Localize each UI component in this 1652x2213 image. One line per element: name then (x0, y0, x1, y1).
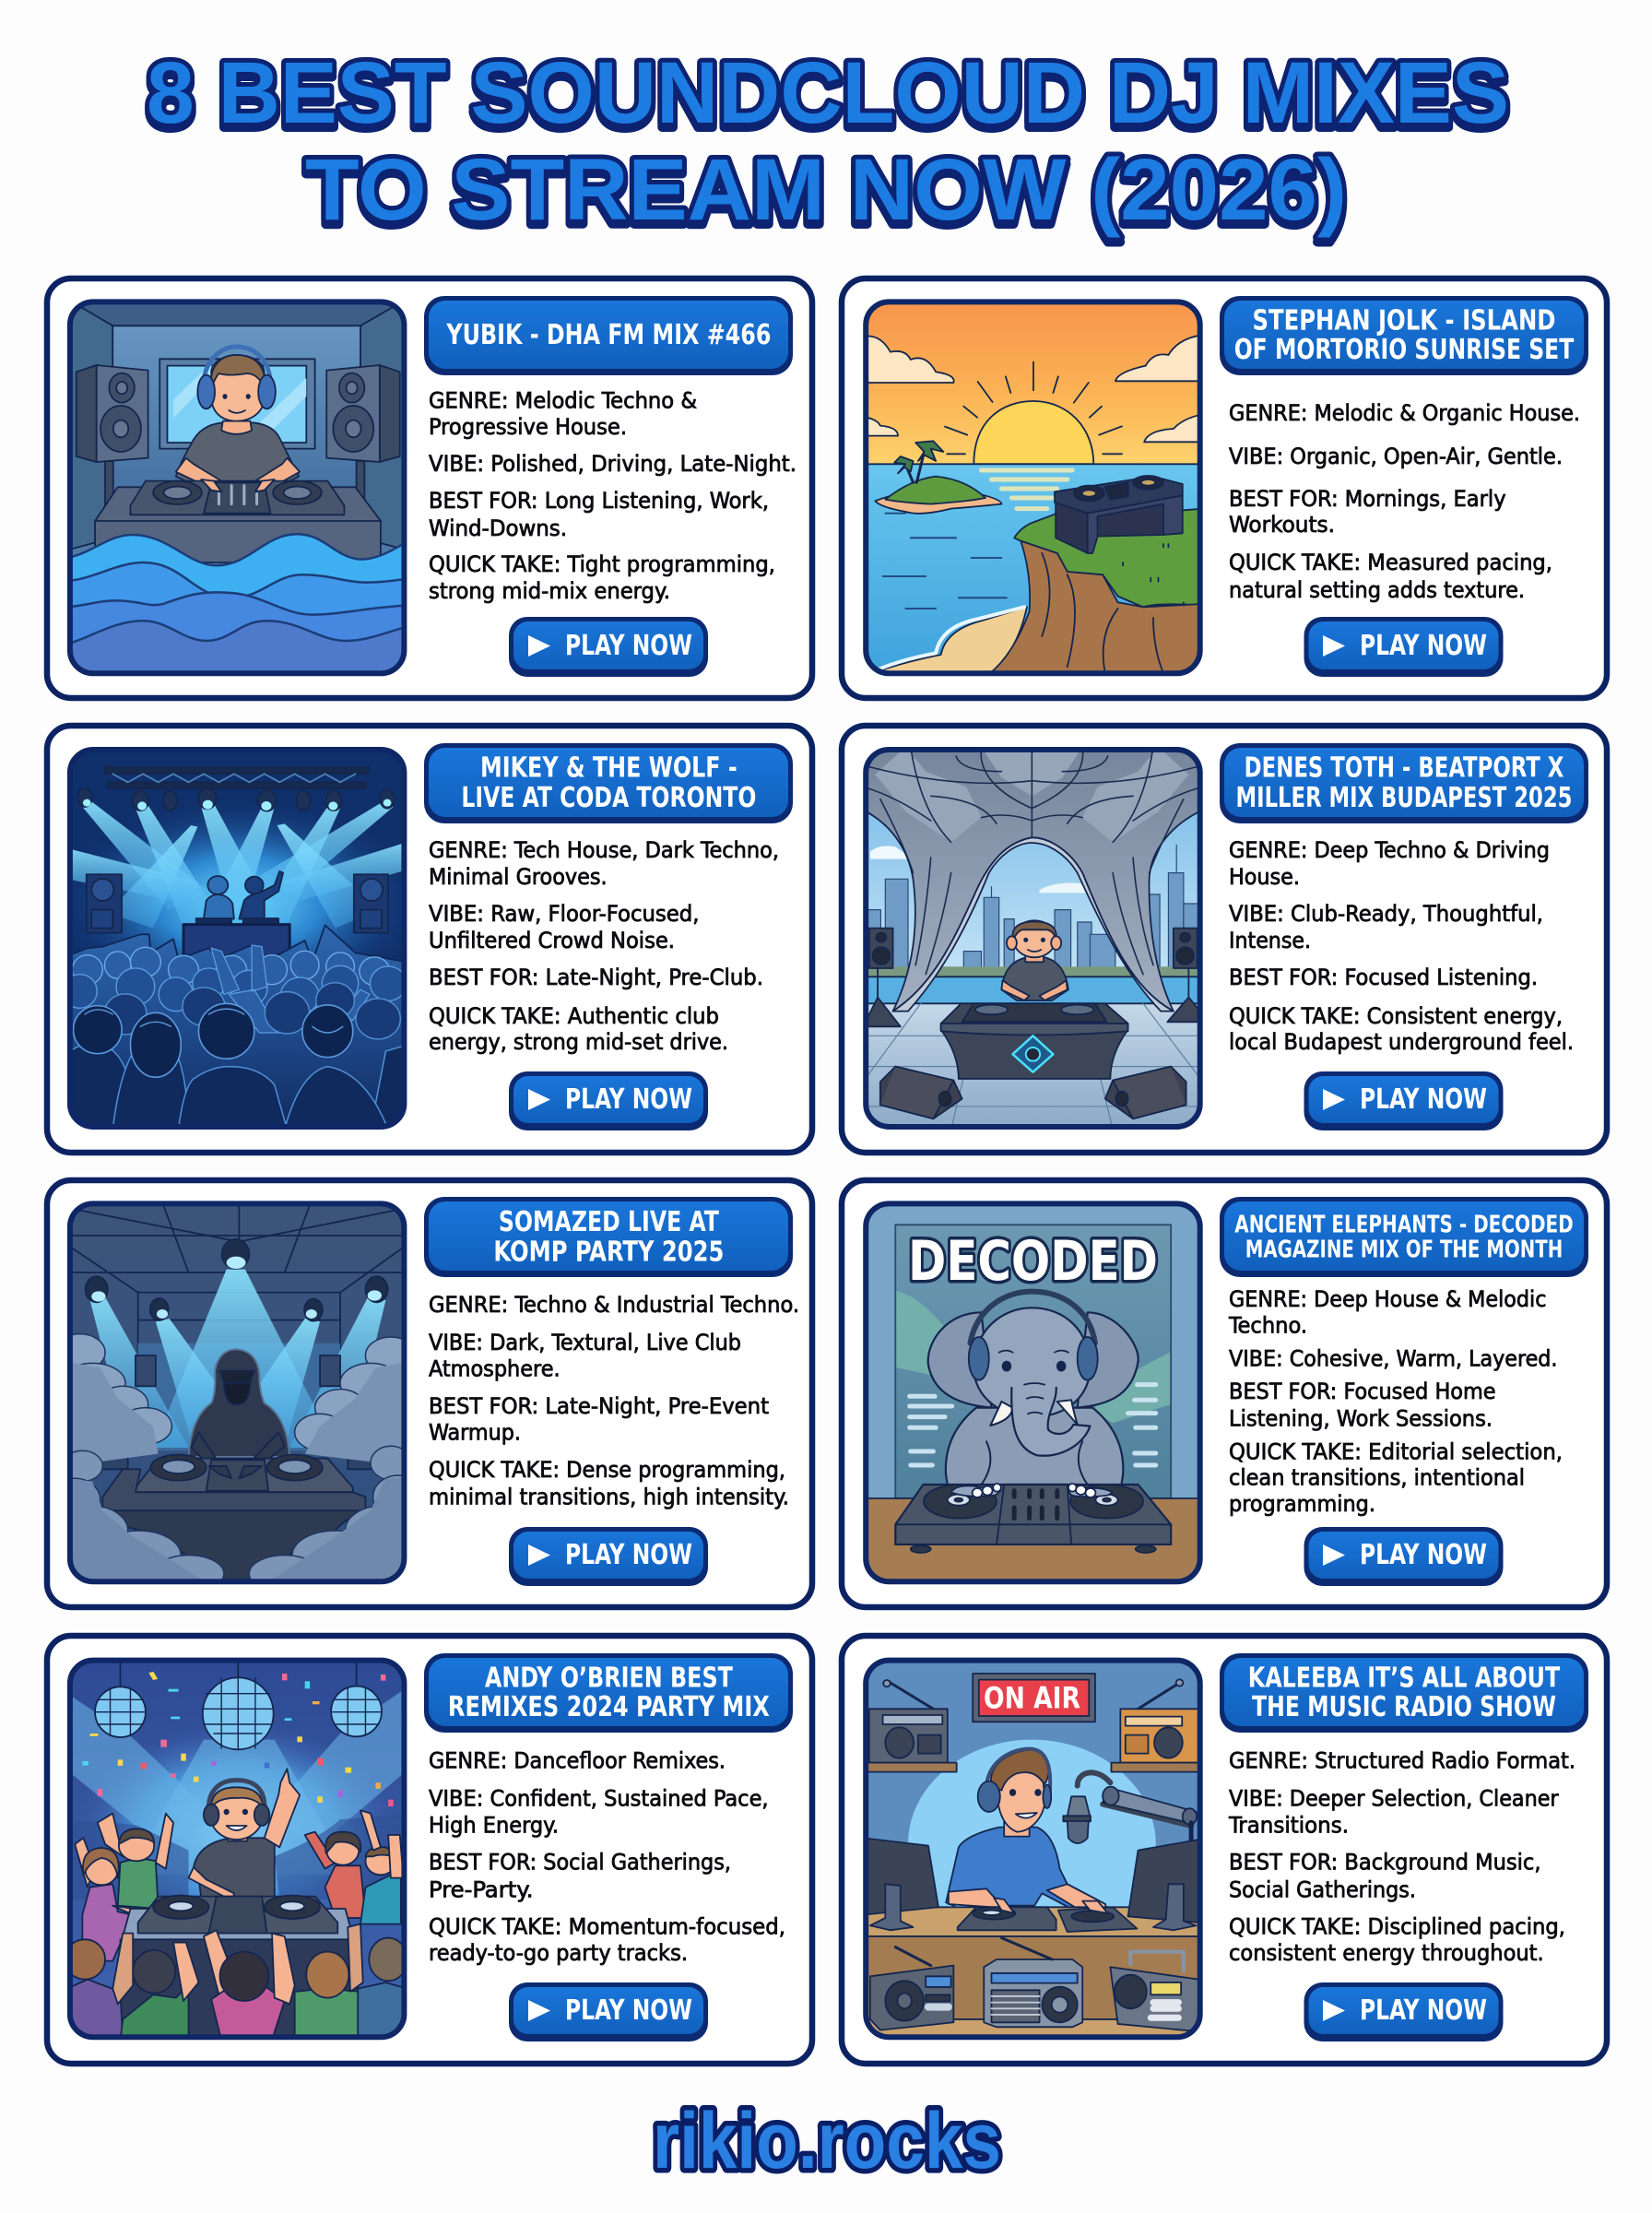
vibe (1228, 1784, 1560, 1838)
play button (1304, 617, 1503, 677)
genre: GENRE: Structured Radio Format. (1229, 1746, 1575, 1773)
panel: Stephan Jolk (842, 278, 1607, 698)
best for: Wind-Downs. (429, 515, 567, 541)
genre (429, 387, 697, 440)
footer brand: rikio.rocks (653, 2097, 1001, 2185)
genre: Minimal Grooves. (429, 863, 608, 890)
illustration: hooded DJ with smoke and spotlights (66, 1201, 407, 1584)
genre (1228, 1285, 1547, 1339)
vibe: VIBE: Raw, Floor-Focused, (429, 900, 699, 927)
quick take: QUICK TAKE: Editorial selection, (1229, 1438, 1563, 1464)
best for: Pre-Party. (429, 1876, 533, 1902)
title pill: KALEEBA IT’S ALL ABOUT (1248, 1662, 1560, 1694)
quick take: local Budapest underground feel. (1229, 1028, 1574, 1055)
play button (1304, 1071, 1503, 1130)
play button: PLAY NOW (1360, 1994, 1487, 2027)
title pill: ANCIENT ELEPHANTS - DECODED (1234, 1212, 1574, 1239)
best for: BEST FOR: Focused Home (1229, 1378, 1496, 1404)
quick take: energy, strong mid-set drive. (429, 1028, 728, 1055)
best for: Warmup. (429, 1419, 521, 1446)
vibe (429, 1784, 769, 1838)
best for (429, 487, 769, 541)
title pill: THE MUSIC RADIO SHOW (1252, 1691, 1556, 1723)
title pill (1220, 743, 1588, 823)
best for: BEST FOR: Long Listening, Work, (429, 487, 769, 514)
play button (509, 1071, 708, 1130)
quick take: QUICK TAKE: Tight programming, (429, 550, 775, 577)
title pill: MILLER MIX BUDAPEST 2025 (1235, 782, 1573, 814)
panel: Denes Toth (842, 726, 1607, 1153)
title pill: OF MORTORIO SUNRISE SET (1234, 334, 1575, 366)
best for: BEST FOR: Background Music, (1229, 1849, 1541, 1876)
quick take (429, 1456, 789, 1510)
title pill: LIVE AT CODA TORONTO (461, 782, 756, 814)
vibe: VIBE: Polished, Driving, Late-Night. (429, 450, 796, 477)
genre: GENRE: Tech House, Dark Techno, (429, 836, 779, 863)
genre: GENRE: Melodic & Organic House. (1229, 399, 1580, 426)
genre (1229, 836, 1550, 890)
play button: PLAY NOW (1360, 1539, 1487, 1571)
quick take (1229, 1912, 1565, 1966)
quick take: minimal transitions, high intensity. (429, 1484, 789, 1510)
title pill (424, 296, 793, 375)
genre: GENRE: Deep Techno & Driving (1229, 836, 1550, 863)
quick take: QUICK TAKE: Momentum-focused, (429, 1912, 785, 1939)
play button: PLAY NOW (565, 1994, 692, 2027)
vibe: Unfiltered Crowd Noise. (429, 927, 675, 953)
quick take (429, 1002, 728, 1055)
play button (509, 1982, 708, 2041)
vibe: VIBE: Dark, Textural, Live Club (429, 1329, 741, 1355)
quick take (429, 1912, 785, 1966)
vibe: High Energy. (429, 1811, 559, 1838)
title pill: KOMP PARTY 2025 (493, 1236, 724, 1268)
illustration: party DJ with disco balls and crowd (65, 1658, 407, 2041)
best for: Listening, Work Sessions. (1229, 1405, 1493, 1432)
quick take (1229, 1002, 1574, 1055)
quick take: QUICK TAKE: Authentic club (429, 1002, 719, 1029)
panel: Mikey and the Wolf (47, 726, 812, 1153)
quick take: programming. (1229, 1490, 1375, 1517)
quick take: ready-to-go party tracks. (429, 1939, 688, 1966)
play button (1304, 1527, 1503, 1586)
quick take: QUICK TAKE: Dense programming, (429, 1456, 785, 1483)
vibe: VIBE: Organic, Open-Air, Gentle. (1229, 443, 1563, 469)
title pill (424, 743, 793, 823)
best for (429, 1392, 769, 1446)
vibe: Atmosphere. (429, 1355, 560, 1382)
quick take (429, 550, 775, 604)
title pill: SOMAZED LIVE AT (499, 1206, 719, 1238)
best for: BEST FOR: Late-Night, Pre-Event (429, 1392, 769, 1419)
title pill: REMIXES 2024 PARTY MIX (448, 1691, 770, 1723)
genre (429, 836, 779, 890)
genre: Techno. (1228, 1312, 1307, 1339)
play button: PLAY NOW (565, 1083, 692, 1116)
genre: House. (1229, 863, 1300, 890)
best for: BEST FOR: Focused Listening. (1229, 964, 1538, 990)
title pill: STEPHAN JOLK - ISLAND (1252, 305, 1556, 337)
quick take: QUICK TAKE: Disciplined pacing, (1229, 1912, 1565, 1939)
title pill: YUBIK - DHA FM MIX #466 (446, 319, 771, 351)
genre: GENRE: Melodic Techno & (429, 387, 697, 414)
quick take: natural setting adds texture. (1229, 576, 1525, 603)
quick take (1229, 549, 1552, 603)
vibe (429, 900, 699, 953)
genre: GENRE: Techno & Industrial Techno. (429, 1291, 799, 1318)
illustration: elephant DJ magazine cover (863, 1201, 1203, 1584)
quick take: clean transitions, intentional (1229, 1464, 1525, 1491)
best for (429, 1849, 731, 1902)
panel: Ancient Elephants (842, 1180, 1607, 1607)
best for: Workouts. (1229, 511, 1335, 538)
best for: BEST FOR: Late-Night, Pre-Club. (429, 964, 763, 990)
title (147, 44, 1509, 239)
title pill (1220, 1197, 1588, 1277)
title: TO STREAM NOW (2026) (305, 141, 1347, 239)
quick take: strong mid-mix energy. (429, 577, 670, 604)
panel: Kaleeba (842, 1636, 1607, 2064)
panel: Andy O'Brien (47, 1636, 812, 2064)
play button (1304, 1982, 1503, 2041)
crowd (63, 925, 407, 1130)
quick take: QUICK TAKE: Measured pacing, (1229, 549, 1552, 575)
title pill (1220, 1653, 1588, 1733)
genre: GENRE: Dancefloor Remixes. (429, 1746, 726, 1773)
best for: BEST FOR: Mornings, Early (1229, 485, 1506, 512)
title pill (1220, 296, 1588, 375)
title pill: MIKEY & THE WOLF - (480, 752, 738, 785)
play button: PLAY NOW (1360, 1083, 1487, 1116)
quick take (1229, 1438, 1563, 1517)
vibe: VIBE: Confident, Sustained Pace, (429, 1784, 769, 1811)
vibe (1229, 900, 1543, 953)
illustration: elephant DJ magazine cover: DECODED (908, 1229, 1158, 1294)
vibe: Transitions. (1228, 1811, 1349, 1838)
illustration: sunrise over island cliff (863, 299, 1203, 676)
play button (509, 1527, 708, 1586)
best for: Social Gatherings. (1229, 1876, 1416, 1902)
genre: Progressive House. (429, 413, 627, 440)
title pill: DENES TOTH - BEATPORT X (1245, 752, 1564, 785)
quick take: QUICK TAKE: Consistent energy, (1229, 1002, 1563, 1029)
vibe: VIBE: Cohesive, Warm, Layered. (1229, 1345, 1558, 1372)
vibe: VIBE: Deeper Selection, Cleaner (1229, 1784, 1560, 1811)
vibe: VIBE: Club-Ready, Thoughtful, (1229, 900, 1543, 927)
vibe: Intense. (1229, 927, 1311, 953)
panel: Yubik (47, 278, 812, 698)
title pill: ANDY O’BRIEN BEST (485, 1662, 733, 1694)
play button: PLAY NOW (565, 630, 692, 662)
best for: BEST FOR: Social Gatherings, (429, 1849, 731, 1876)
illustration: club stage with crowd (57, 747, 421, 1130)
illustration: radio host with on-air sign (863, 1658, 1203, 2040)
play button: PLAY NOW (565, 1539, 692, 1571)
illustration: radio host with on-air sign: ON AIR (984, 1681, 1080, 1716)
best for (1229, 485, 1506, 538)
best for (1229, 1849, 1541, 1902)
panel: Somazed (47, 1180, 812, 1607)
title pill: MAGAZINE MIX OF THE MONTH (1245, 1236, 1563, 1263)
genre: GENRE: Deep House & Melodic (1229, 1285, 1547, 1312)
best for (1229, 1378, 1496, 1432)
illustration: DJ in studio with waves (67, 299, 407, 676)
illustration: DJ under arched canopy with skyline (863, 747, 1203, 1130)
title: 8 BEST SOUNDCLOUD DJ MIXES (147, 44, 1509, 142)
play button: PLAY NOW (1360, 630, 1487, 662)
title pill (424, 1653, 793, 1733)
title pill (424, 1197, 793, 1277)
play button (509, 617, 708, 677)
quick take: consistent energy throughout. (1229, 1939, 1544, 1966)
vibe (429, 1329, 741, 1382)
